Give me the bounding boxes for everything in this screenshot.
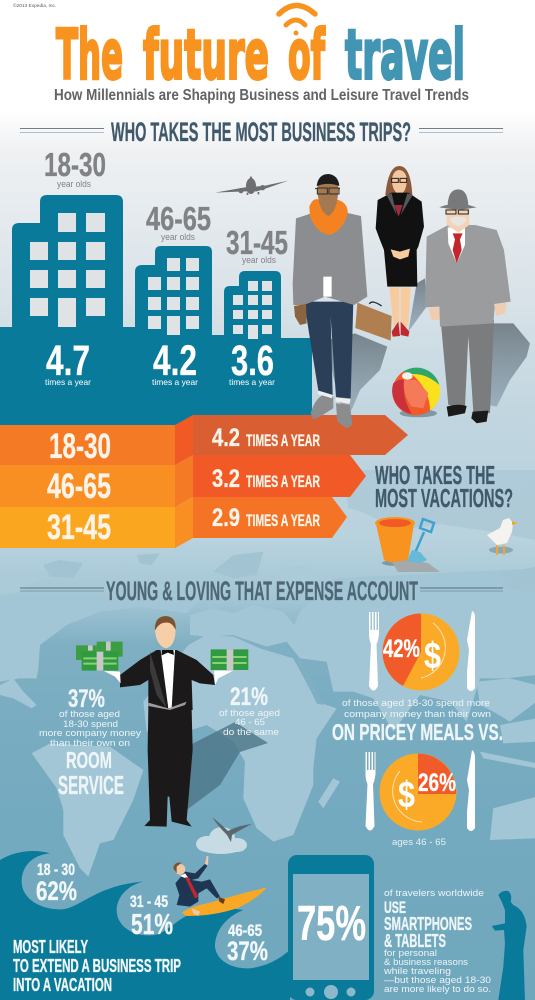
icon: fork and knife top: [369, 611, 475, 691]
text: 21 percent: [219, 683, 280, 738]
business trip numbers: 4.2: [153, 337, 197, 385]
building labels: year olds: [161, 232, 195, 242]
heading: vacations: [375, 460, 513, 513]
vacation age and frequency labels: TIMES A YEAR: [246, 472, 320, 491]
title: future: [143, 16, 269, 96]
icon: cash stack right: [211, 649, 248, 670]
icon: smartphone: 75%: [297, 897, 366, 951]
wave labels: 37%: [227, 936, 268, 966]
wave labels: 51%: [131, 909, 173, 941]
text: 21 percent: 21%: [230, 683, 268, 711]
text: room service: ROOM: [66, 747, 112, 773]
vacation age and frequency labels: 4.2: [212, 424, 240, 452]
text: smartphones and tablets: are more likely to do so.: [384, 984, 491, 995]
chart: 42 percent plate: $: [424, 635, 441, 676]
icon: cloud: [196, 827, 247, 854]
building labels: year olds: [57, 179, 91, 189]
text: room service: 37%: [68, 685, 105, 713]
chart: 42 percent plate: [382, 614, 460, 690]
building labels: year olds: [242, 255, 276, 265]
text: pricey meals: company money than their own: [344, 709, 491, 720]
text: smartphones and tablets: —but those aged 18-30: [384, 975, 491, 986]
text: smartphones and tablets: SMARTPHONES: [384, 914, 472, 934]
text: room service: [39, 685, 141, 800]
title: The: [56, 16, 123, 96]
building labels: 31-45: [226, 224, 288, 261]
building labels: [44, 146, 288, 265]
building labels: 46-65: [146, 200, 211, 237]
business trip numbers: [45, 337, 275, 387]
text: 21 percent: do the same: [223, 727, 279, 738]
figure: waiter: [103, 616, 233, 827]
chart: 26 percent plate: $: [398, 774, 415, 815]
business trip numbers: times a year: [45, 377, 91, 387]
text: room service: SERVICE: [58, 770, 124, 800]
vacation age and frequency labels: TIMES A YEAR: [246, 511, 320, 530]
text: pricey meals: [332, 698, 503, 745]
vacation age and frequency labels: 18-30: [49, 427, 111, 466]
vacation age and frequency labels: TIMES A YEAR: [246, 431, 320, 450]
text: 21 percent: 46 - 65: [235, 717, 265, 728]
shoreline: [345, 470, 535, 540]
text: smartphones and tablets: USE: [384, 898, 406, 917]
figure: older man: [425, 189, 511, 423]
figure: surfer: [173, 856, 225, 916]
icon: bucket and shovel: [375, 517, 440, 572]
figure: woman: [376, 166, 424, 337]
wave labels: 62%: [36, 876, 77, 906]
chart: 26 percent plate: 26%: [418, 769, 456, 797]
chart: 42 percent plate: 42%: [383, 635, 420, 663]
text: smartphones and tablets: of travelers worldwide: [384, 888, 484, 899]
building labels: 18-30: [44, 146, 106, 183]
title: [56, 16, 465, 96]
icon: beach ball: [392, 368, 440, 417]
subtitle: How Millennials are Shaping Business and Leisure Travel Trends: [54, 87, 469, 104]
world map: [0, 552, 535, 877]
text: extend a business trip: TO EXTEND A BUSINESS TRIP: [13, 956, 181, 976]
text: room service: 18-30 spend: [63, 719, 118, 730]
vacation bands and arrows: [0, 415, 408, 548]
text: smartphones and tablets: for personal: [384, 948, 437, 959]
vacation age and frequency labels: [47, 424, 320, 547]
business trip numbers: 4.7: [46, 337, 90, 385]
wave labels: 46-65: [228, 921, 262, 940]
business trip numbers: times a year: [152, 377, 198, 387]
icon: smartphone: [288, 855, 374, 1000]
vacation age and frequency labels: 2.9: [212, 504, 240, 532]
icon: wifi signal: [279, 6, 315, 36]
wave labels: 18 - 30: [37, 860, 75, 879]
icon: surfboard: [182, 887, 267, 916]
shadow map behind figures: [327, 278, 530, 410]
wave labels: [36, 860, 268, 966]
icon: bird: [212, 817, 252, 842]
business trip numbers: times a year: [229, 377, 275, 387]
teal city band: [0, 195, 312, 416]
text: extend a business trip: MOST LIKELY: [13, 937, 88, 957]
waves: [0, 851, 290, 1000]
text: room service: of those aged: [59, 709, 120, 720]
icon: briefcase: [355, 302, 392, 341]
text: room service: than their own on: [50, 738, 130, 749]
text: extend a business trip: [13, 937, 181, 995]
text: extend a business trip: INTO A VACATION: [13, 975, 112, 995]
figure: young man: [293, 174, 367, 428]
vacation age and frequency labels: 46-65: [47, 467, 111, 506]
text: smartphones and tablets: & business reasons: [384, 957, 468, 968]
vacation age and frequency labels: 3.2: [212, 465, 240, 493]
text: smartphones and tablets: [383, 888, 491, 995]
icon: cash stacks left: [76, 642, 123, 671]
figure: phone user silhouette: [492, 891, 527, 1000]
text: room service: more company money: [39, 728, 141, 739]
chart: 26 percent plate: [380, 754, 456, 830]
copyright: ©2013 Expedia, Inc.: [13, 2, 56, 9]
icon: fork and knife bottom: [366, 750, 475, 831]
icon: seagull: [487, 518, 518, 555]
building windows: [30, 213, 272, 339]
wave labels: 31 - 45: [130, 892, 168, 911]
plane: [215, 177, 288, 195]
text: smartphones and tablets: while traveling: [383, 966, 451, 977]
waiter shadow: [180, 722, 268, 815]
text: 21 percent: of those aged: [219, 708, 280, 719]
text: pricey meals: of those aged 18-30 spend more: [342, 698, 490, 709]
title: of: [288, 16, 325, 96]
vacation age and frequency labels: 31-45: [47, 508, 111, 547]
text: smartphones and tablets: & TABLETS: [384, 931, 446, 951]
text: ages 46-65: ages 46 - 65: [392, 837, 446, 848]
business trip numbers: 3.6: [231, 337, 274, 385]
